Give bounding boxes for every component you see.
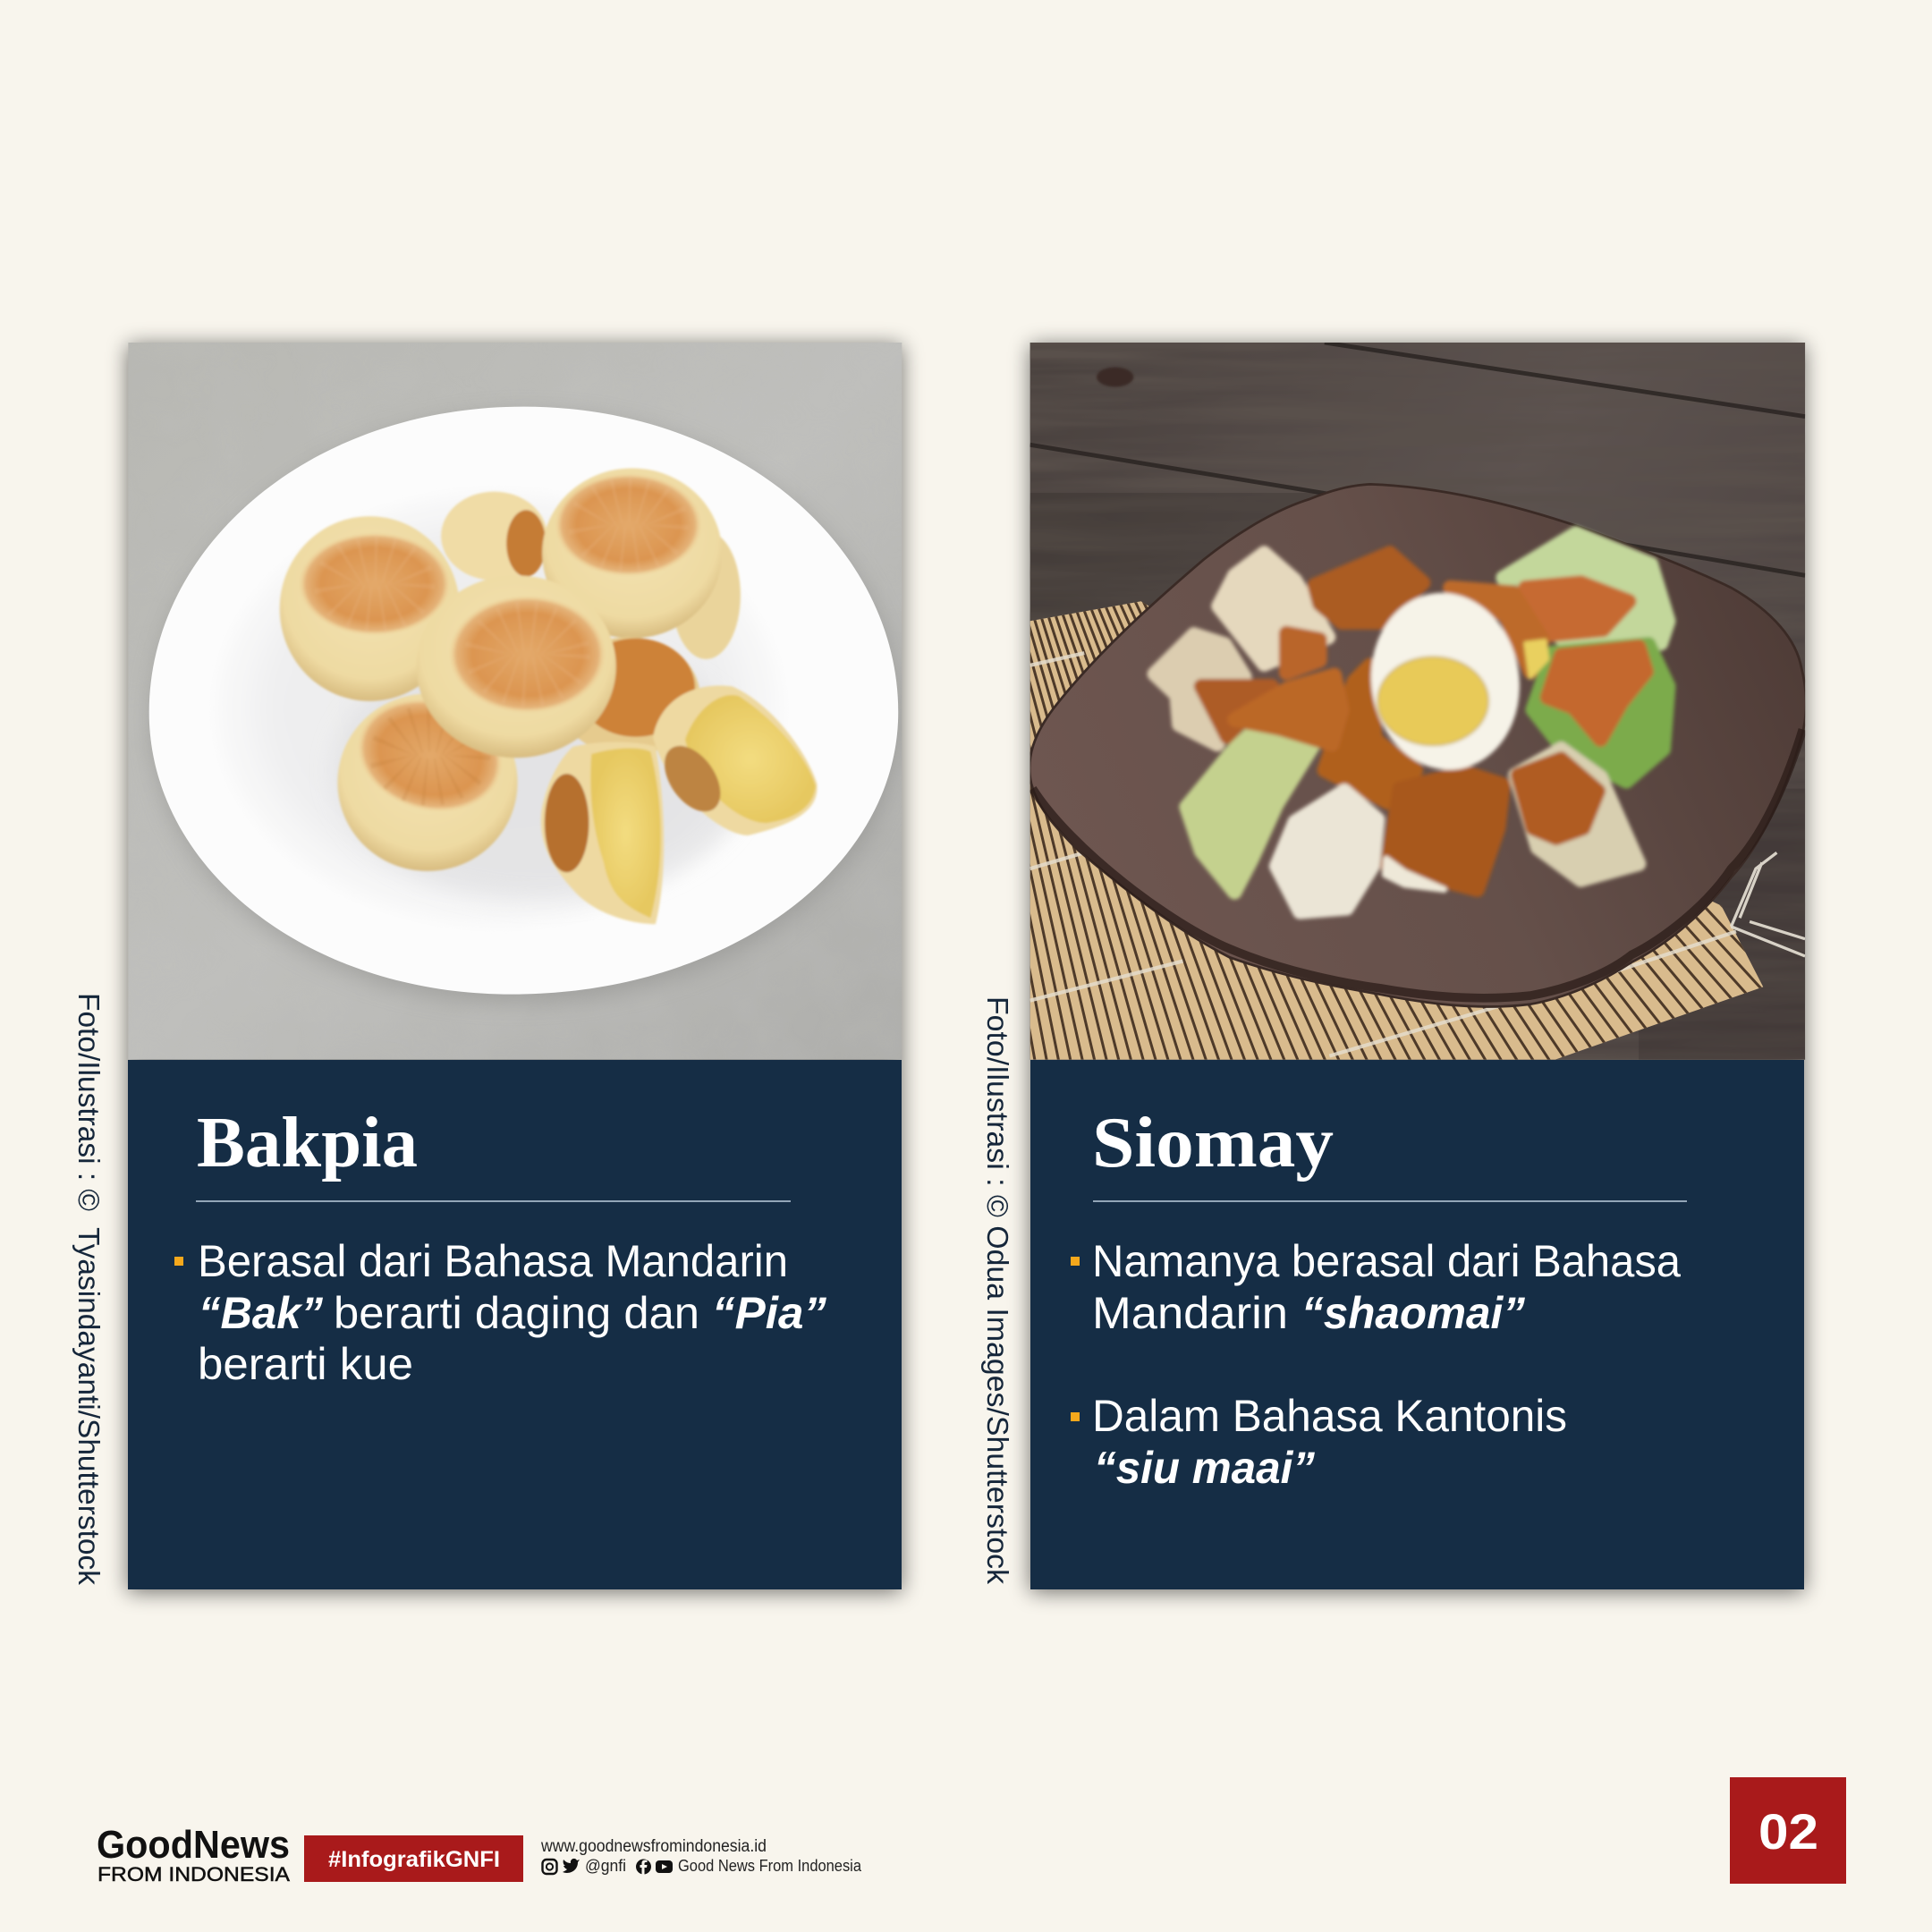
hashtag badge: #InfografikGNFI (328, 1847, 500, 1872)
pastry: cut piece bottom (541, 742, 664, 924)
heading: Bakpia: Bakpia (197, 1104, 418, 1182)
pastry: behind centre (578, 636, 700, 751)
pastry: centre (417, 575, 616, 758)
text block: Siomay origin: “siu maai” (1094, 1443, 1315, 1493)
photo: siomay on a brown plate (1030, 343, 1805, 1060)
logo: GoodNews From Indonesia: GoodNews (97, 1823, 290, 1867)
website and social links: @gnfi (585, 1857, 626, 1875)
pastry: back right (672, 531, 741, 659)
pastry: top left (280, 516, 460, 701)
pastry: top right (542, 468, 722, 639)
text block: Siomay origin: Mandarin (1092, 1288, 1288, 1338)
text block: Siomay origin: Dalam Bahasa Kantonis (1092, 1391, 1567, 1441)
hashtag badge (304, 1835, 523, 1882)
text block: Siomay origin: “shaomai” (1301, 1288, 1525, 1338)
text block: Siomay origin: Namanya berasal dari Bahasa (1092, 1236, 1681, 1286)
logo: GoodNews From Indonesia: FROM INDONESIA (97, 1863, 290, 1885)
icon: youtube (656, 1860, 673, 1873)
panel: Siomay card (1014, 329, 1819, 1608)
pastry: cut piece right (653, 685, 818, 835)
panel: Bakpia card (128, 343, 902, 1592)
text block: Siomay origin (1071, 1236, 1681, 1493)
text block: Bakpia origin: “Pia” (712, 1288, 826, 1338)
text block: Bakpia origin: Berasal dari Bahasa Mandarin (198, 1236, 788, 1286)
website and social links: www.goodnewsfromindonesia.id (540, 1837, 767, 1856)
siomay food (1155, 533, 1668, 911)
heading: Siomay: Siomay (1092, 1104, 1334, 1182)
plate (1030, 484, 1806, 1006)
photo credit: Bakpia: Foto/Ilustrasi : © Tyasindayanti/Shutterstock (72, 993, 106, 1585)
website and social links: Good News From Indonesia (678, 1857, 862, 1875)
photo credit: Siomay: Foto/Ilustrasi : © Odua Images/Shutterstock (981, 996, 1014, 1585)
icon: instagram (542, 1860, 556, 1874)
icon: facebook (636, 1859, 651, 1875)
website and social links (540, 1837, 862, 1875)
page number badge (1730, 1777, 1846, 1884)
icon: twitter (563, 1859, 580, 1873)
pastry: bottom left (337, 682, 518, 871)
text block: Bakpia origin: berarti daging dan (334, 1288, 699, 1338)
text block: Bakpia origin: “Bak” (199, 1288, 323, 1338)
text block: Bakpia origin (174, 1236, 826, 1389)
bamboo mat (1030, 601, 1764, 1060)
logo: GoodNews From Indonesia (97, 1823, 290, 1885)
text block: Bakpia origin: berarti kue (198, 1339, 413, 1389)
page number badge: 02 (1758, 1803, 1818, 1860)
pastry: back (441, 492, 547, 580)
photo: bakpia on a white plate (128, 343, 902, 1060)
fringe (1731, 852, 1805, 956)
